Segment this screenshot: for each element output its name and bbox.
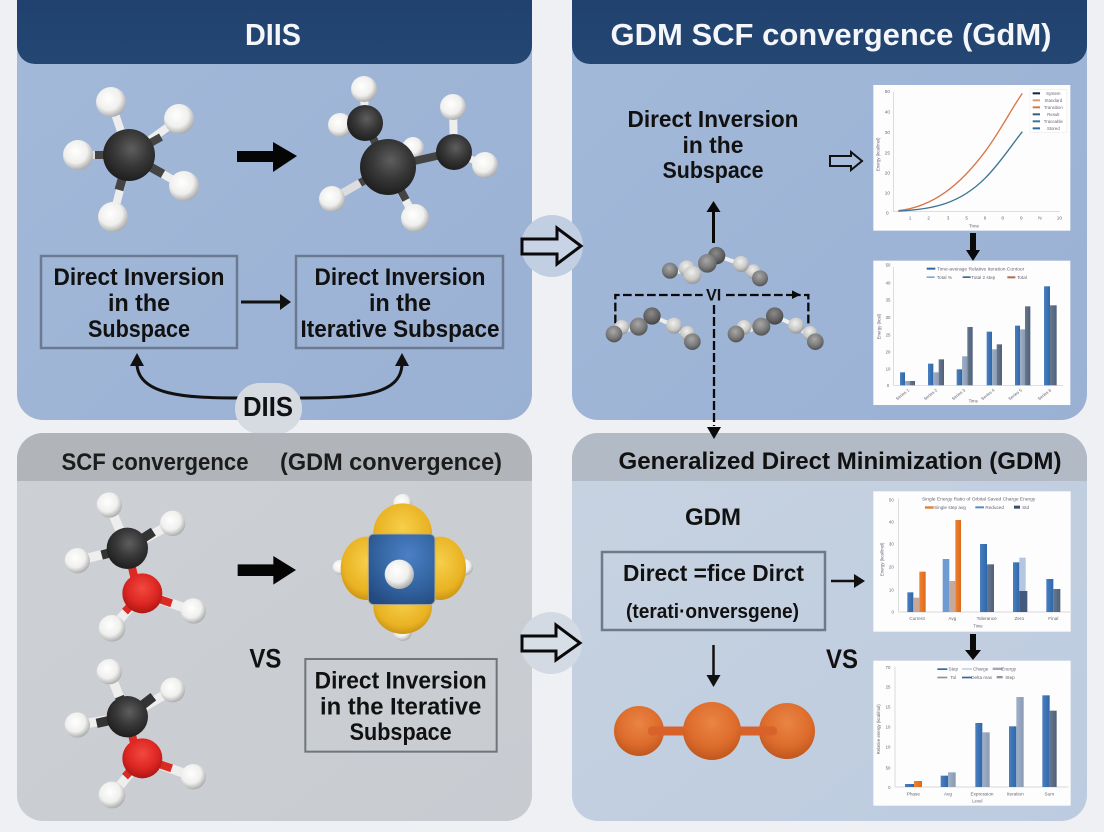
arrow: molecule up to text [706, 201, 720, 243]
bar chart: bottom right: 10 [886, 725, 891, 730]
text box: Direct Inversion in the Iterative Subspace: in the [369, 290, 431, 317]
text box: direct iteration: (terati·onversgene) [626, 601, 799, 623]
bar chart: middle right: 0 [891, 610, 894, 615]
bar chart: bottom right: Delta max [971, 675, 993, 680]
bar chart: middle right: Std [1022, 505, 1030, 510]
line chart: 2 [927, 216, 930, 221]
molecule: bottom left [606, 307, 701, 350]
text box: Direct Inversion in the Subspace: in the [108, 290, 170, 317]
line chart [873, 85, 1070, 231]
line chart: N [1038, 216, 1042, 221]
header bar: Generalized Direct Minimization [572, 433, 1087, 481]
text box: Direct Inversion in the Iterative Subspace [305, 659, 497, 752]
bar chart: top right: Time-average Relative Iteration Contour [937, 267, 1025, 272]
bar chart: bottom right: Expression [970, 791, 994, 796]
bar chart: middle right: 40 [889, 519, 894, 524]
text box: Direct Inversion in the Iterative Subspace: Iterative Subspace [300, 316, 500, 343]
bar chart: bottom right: Sum [1045, 791, 1054, 796]
icon: space-filling molecule [333, 494, 473, 641]
text box: direct iteration [602, 552, 825, 630]
bar chart: top right: Series 3 [951, 387, 967, 401]
bar chart: top right: Time [969, 398, 979, 403]
panel: DIIS [17, 0, 532, 434]
line chart: System [1046, 91, 1061, 96]
bar chart: top right [873, 261, 1070, 405]
dashed arrow: top right diagram down to GDM panel [707, 305, 721, 439]
label: DIIS [235, 383, 302, 434]
panel: Generalized Direct Minimization [572, 433, 1087, 821]
arrow: methanol to space-filling model [238, 556, 296, 585]
bar chart: top right: 25 [886, 332, 891, 337]
bar chart: bottom right: 10 [886, 745, 891, 750]
label: VS: VS [249, 643, 281, 673]
text: Direct Inversion in the Subspace: Direct Inversion [628, 106, 798, 132]
label: GDM: GDM [685, 504, 741, 531]
bar chart: middle right: Time [973, 624, 983, 629]
bar chart: middle right: 10 [889, 587, 894, 592]
arrow: box down to molecule [706, 645, 720, 687]
arrowhead: dashed right [792, 290, 801, 299]
line chart: 20 [885, 170, 890, 175]
arrow: box to box [241, 294, 291, 310]
bar chart: middle right: Avg [948, 616, 957, 621]
line chart: 6 [984, 216, 987, 221]
bar chart: top right: Series 4 [980, 387, 996, 401]
line chart: Stored [1047, 126, 1060, 131]
panel: SCF convergence vs GDM convergence [17, 433, 532, 821]
bar chart: bottom right: Phase [907, 791, 920, 796]
text box: Direct Inversion in the Subspace: Direct Inversion [54, 264, 224, 291]
bar chart: bottom right: Relative energy (kcal/mol) [876, 704, 881, 754]
bar chart: top right: Total % [937, 275, 952, 280]
bar chart: middle right: 50 [889, 497, 894, 502]
icon: orange three-atom molecule [614, 702, 815, 760]
text box: Direct Inversion in the Iterative Subspace: in the Iterative [320, 693, 481, 720]
line chart: Time [969, 224, 979, 229]
bar chart: top right: 20 [886, 350, 891, 355]
bar chart: top right: Series 1 [895, 387, 911, 401]
text box: Direct Inversion in the Subspace [41, 256, 237, 348]
line chart: 10 [885, 190, 890, 195]
bar chart: top right: Total [1017, 275, 1027, 280]
line chart: 9 [1020, 216, 1023, 221]
icon: methane molecule [63, 87, 199, 232]
bar chart: bottom right: Energy [1001, 667, 1017, 672]
line chart: 30 [885, 130, 890, 135]
line chart: 50 [885, 89, 890, 94]
bar chart: top right: 35 [886, 298, 891, 303]
arrow: box to bar chart [831, 574, 865, 588]
bar chart: bottom right: Iteration [1007, 791, 1024, 796]
bar chart: top right: 50 [886, 262, 891, 267]
bar chart: bottom right: Level [972, 799, 983, 804]
bar chart: bottom right: 70 [886, 665, 891, 670]
bar chart: middle right: Reduced [985, 505, 1004, 510]
bar chart: top right: Energy (kcal) [877, 313, 882, 339]
bar chart: bottom right: 50 [886, 765, 891, 770]
bar chart: top right: 30 [886, 315, 891, 320]
label: DIIS: DIIS [243, 391, 293, 422]
text: Direct Inversion in the Subspace: Subspace [662, 157, 764, 183]
line chart: 1 [909, 216, 912, 221]
bar chart: bottom right: Step [949, 667, 959, 672]
molecule: bottom right [728, 307, 824, 350]
icon: methanol molecule top [65, 492, 206, 642]
line chart: Traceable [1044, 119, 1063, 124]
panel: GDM SCF convergence [572, 0, 1087, 420]
bar chart: middle right [873, 491, 1071, 632]
line chart: 3 [947, 216, 950, 221]
line chart: Energy (kcal/mol) [875, 137, 880, 171]
diagram: branched molecules with dashed arrows [606, 247, 824, 350]
bar chart: middle right: 30 [889, 541, 894, 546]
bar chart: middle right: Current [909, 616, 925, 621]
arrow: line chart down to bar chart [966, 233, 980, 261]
arrow: middle chart down to bottom chart [965, 634, 981, 660]
header bar: GDM SCF convergence: GDM SCF convergence (GdM) [610, 17, 1052, 52]
bar chart: bottom right: Charge [973, 667, 989, 672]
bar chart: middle right: Energy (kcal/mol) [879, 542, 884, 576]
line chart: 25 [885, 150, 890, 155]
line chart: 8 [1001, 216, 1004, 221]
header bar: DIIS: DIIS [245, 17, 301, 52]
text: Direct Inversion in the Subspace: in the [682, 132, 744, 158]
arrow: methane to ethane [237, 142, 297, 172]
header bar: Generalized Direct Minimization: Generalized Direct Minimization (GDM) [618, 448, 1062, 475]
arrow: curved right from DIIS [300, 353, 409, 398]
bar chart: top right: Series 5 [1007, 387, 1023, 401]
text box: Direct Inversion in the Iterative Subspace [296, 256, 503, 348]
bar chart: bottom right: 0 [888, 785, 891, 790]
header bar: SCF and GDM convergence [17, 433, 532, 481]
bar chart: top right: 40 [886, 280, 891, 285]
bar chart: top right: Series 2 [923, 387, 939, 401]
header bar: SCF and GDM convergence: SCF convergence [62, 449, 248, 476]
bar chart: middle right: Zero [1015, 616, 1025, 621]
label: VI: VI [706, 286, 721, 305]
bar chart: bottom right: Avg [944, 791, 952, 796]
bar chart: bottom right: Step [1005, 675, 1015, 680]
text box: Direct Inversion in the Subspace: Subspace [88, 316, 190, 343]
arrow: curved left from DIIS [130, 353, 238, 398]
text: Direct Inversion in the Subspace [628, 106, 798, 183]
text box: Direct Inversion in the Iterative Subspace: Direct Inversion [314, 264, 486, 291]
molecule: top [662, 247, 768, 286]
bar chart: top right: 10 [886, 366, 891, 371]
bar chart: bottom right [873, 661, 1071, 806]
line chart: Transition [1044, 105, 1063, 110]
bar chart: middle right: Single Energy Ratio of Orbital Saved Charge Energy [922, 496, 1036, 501]
icon: methanol molecule bottom [65, 659, 206, 808]
bar chart: top right: Total 2 step [971, 275, 996, 280]
bar chart: middle right: Tolerance [977, 616, 997, 621]
connector: hollow arrow top panels [521, 215, 583, 277]
bar chart: bottom right: 15 [886, 705, 891, 710]
line chart: 40 [885, 110, 890, 115]
label: VS: VS [826, 644, 858, 674]
line chart: 10 [1057, 216, 1062, 221]
bar chart: bottom right: 25 [886, 685, 891, 690]
text box: direct iteration: Direct =fice Dirct [623, 560, 804, 586]
bar chart: middle right: 20 [889, 564, 894, 569]
line chart: 0 [886, 210, 889, 215]
bar chart: middle right: Final [1048, 616, 1058, 621]
connector: hollow arrow bottom panels [520, 612, 582, 674]
line chart: 5 [965, 216, 968, 221]
text box: Direct Inversion in the Iterative Subspace: Subspace [350, 719, 452, 746]
header bar: SCF and GDM convergence: (GDM convergence) [280, 449, 502, 476]
bar chart: middle right: Single step avg [934, 505, 966, 510]
bar chart: top right: Series 6 [1037, 387, 1053, 401]
text box: Direct Inversion in the Iterative Subspace: Direct Inversion [315, 667, 487, 694]
bar chart: bottom right: Tol [950, 675, 956, 680]
arrow: hollow to line chart [830, 152, 862, 170]
header bar: DIIS [17, 0, 532, 64]
header bar: GDM SCF convergence [572, 0, 1087, 64]
bar chart: top right: 0 [887, 383, 890, 388]
dashed branch lines [615, 295, 808, 323]
icon: ethane molecule [319, 76, 498, 232]
line chart: Standard [1045, 98, 1063, 103]
line chart: Result [1047, 112, 1060, 117]
